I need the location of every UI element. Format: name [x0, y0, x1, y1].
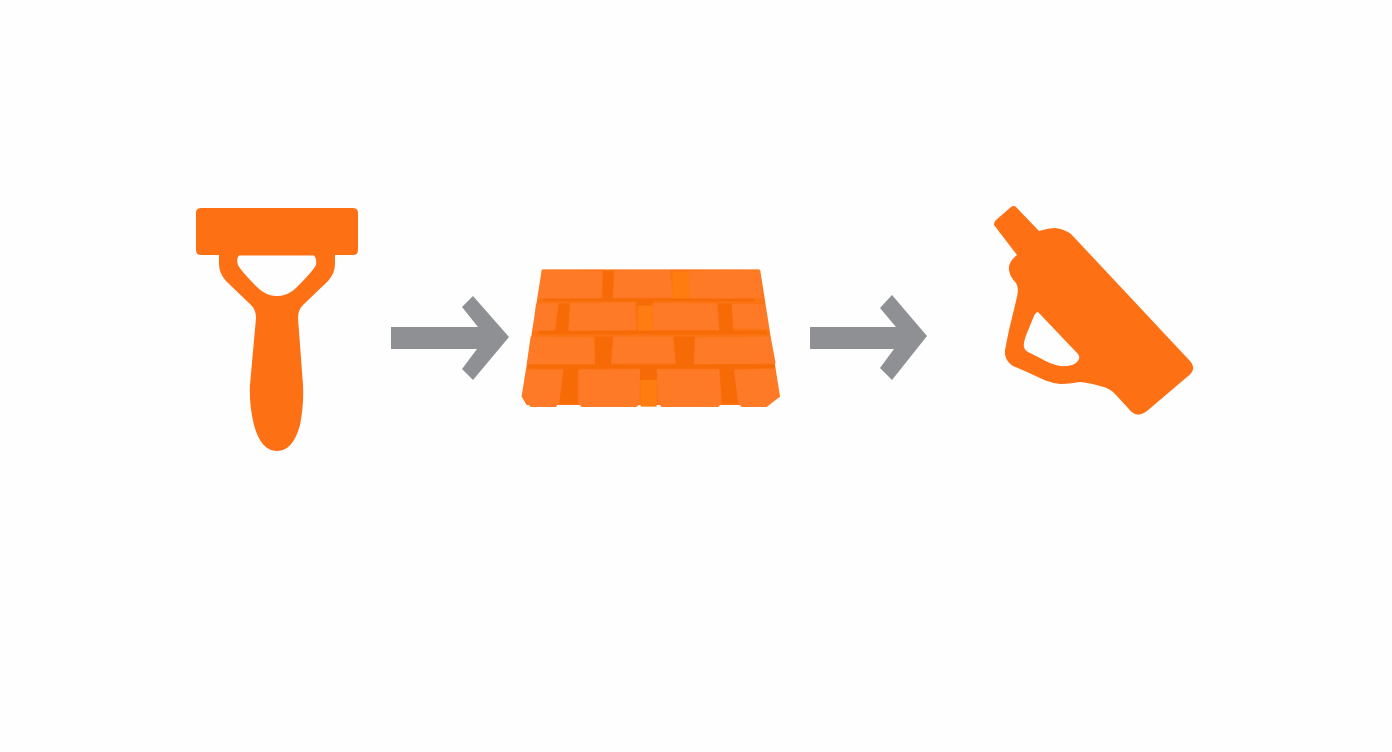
arrow: bricks to bottle — [810, 295, 927, 380]
icon: peeler — [196, 208, 358, 451]
mortar highlights — [638, 272, 689, 407]
arrow: peeler to bricks — [391, 296, 509, 380]
dark mortar seams — [528, 271, 775, 403]
icon: tilted bottle with handle — [994, 206, 1193, 415]
mortar base — [522, 269, 780, 405]
icon: brick paving — [522, 269, 780, 407]
bricks — [522, 270, 780, 407]
